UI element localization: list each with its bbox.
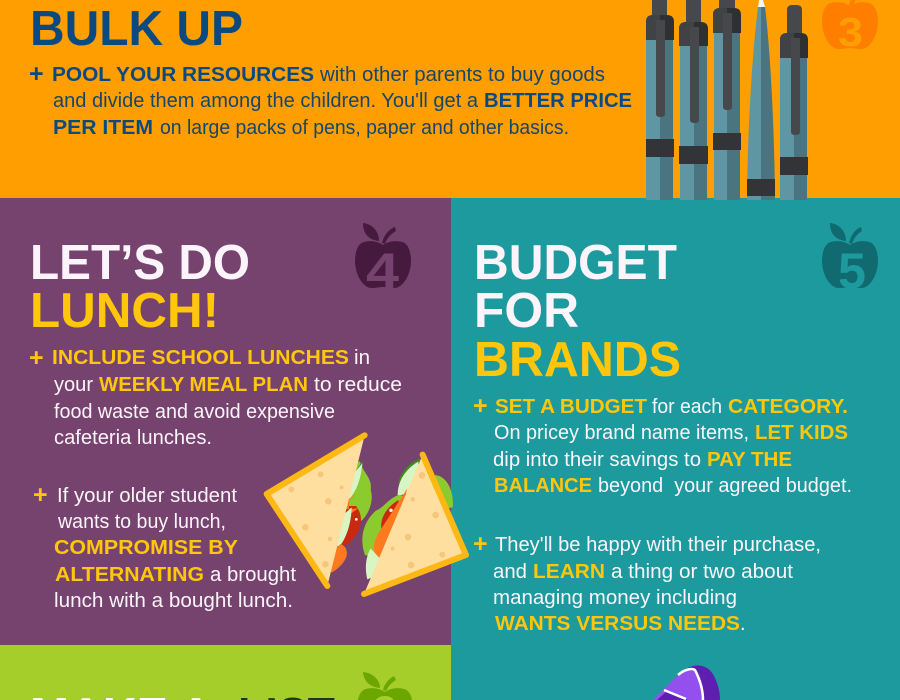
icon: apple number 6 — [357, 672, 413, 700]
text block: include school lunches: your — [54, 374, 93, 396]
text block: pool your resources: + — [29, 60, 44, 88]
text block: set a budget — [473, 392, 852, 497]
text block: happy with purchase: They'll be happy with their purchase, — [495, 534, 821, 556]
icon: apple number 3 — [822, 0, 878, 55]
text block: pool your resources: on large packs of pens, paper and other basics. — [160, 117, 569, 139]
panel: let's do lunch — [0, 198, 466, 645]
text block: older student compromise: COMPROMISE BY — [54, 537, 239, 559]
heading: budget for brands: BRANDS — [474, 333, 681, 387]
text block: include school lunches — [29, 344, 402, 449]
icon: purple shoe — [653, 665, 720, 700]
text block: include school lunches: INCLUDE SCHOOL LUNCHES — [52, 347, 349, 369]
text block: older student compromise: ALTERNATING — [55, 564, 204, 586]
icon: sandwich — [267, 435, 466, 594]
heading: budget for brands: BUDGET — [474, 236, 677, 290]
pen 1 — [646, 0, 674, 200]
text block: happy with purchase: and — [493, 561, 527, 583]
text block: happy with purchase: LEARN — [533, 561, 605, 583]
text block: happy with purchase — [473, 530, 821, 635]
heading: let's do lunch — [30, 236, 250, 338]
text block: older student compromise: If your older student — [57, 485, 237, 507]
pen 3 — [713, 0, 741, 200]
text block: include school lunches: to reduce — [314, 374, 402, 396]
text block: older student compromise: lunch with a bought lunch. — [54, 590, 293, 612]
heading: make a list — [30, 689, 335, 700]
pen 5 — [780, 5, 808, 200]
icon: apple number 5 — [822, 223, 878, 299]
right sandwich half — [362, 455, 466, 594]
text block: happy with purchase: managing money including — [493, 587, 737, 609]
text block: set a budget: CATEGORY. — [728, 396, 848, 418]
text block: pool your resources — [29, 60, 632, 139]
text block: pool your resources: POOL YOUR RESOURCES — [52, 64, 314, 86]
text block: set a budget: + — [473, 392, 488, 420]
icon: apple number 4 — [355, 223, 411, 299]
text block: set a budget: PAY THE — [707, 449, 792, 471]
text block: set a budget: beyond your agreed budget. — [598, 475, 852, 497]
icon: apple number 5: 5 — [838, 243, 866, 299]
text block: set a budget: dip into their savings to — [493, 449, 701, 471]
text block: include school lunches: WEEKLY MEAL PLAN — [99, 374, 308, 396]
panel: budget for brands — [451, 198, 900, 700]
text block: pool your resources: BETTER PRICE — [484, 90, 632, 112]
panel: make a list — [0, 645, 451, 700]
text block: pool your resources: and divide them among the children. You'll get a — [53, 90, 479, 112]
heading: budget for brands: FOR — [474, 284, 579, 338]
text block: set a budget: On pricey brand name items, — [494, 422, 749, 444]
text block: include school lunches: food waste and avoid expensive — [54, 401, 335, 423]
text block: set a budget: for each — [652, 396, 722, 418]
text block: set a budget: SET A BUDGET — [495, 396, 647, 418]
text block: pool your resources: with other parents to buy goods — [319, 64, 605, 86]
heading: bulk up: BULK UP — [30, 2, 243, 56]
text block: happy with purchase: WANTS VERSUS NEEDS — [495, 613, 740, 635]
text block: older student compromise — [33, 481, 296, 612]
text block: happy with purchase: a thing or two about — [611, 561, 793, 583]
text block: pool your resources: PER ITEM — [53, 117, 153, 139]
text block: older student compromise: + — [33, 481, 48, 509]
heading: let's do lunch: LET’S DO — [30, 236, 250, 290]
heading: budget for brands — [474, 236, 681, 387]
text block: older student compromise: wants to buy lunch, — [57, 511, 226, 533]
text block: include school lunches: in — [354, 347, 370, 369]
text block: set a budget: BALANCE — [494, 475, 592, 497]
panel: bulk up — [0, 0, 900, 200]
text block: happy with purchase: + — [473, 530, 488, 558]
text block: set a budget: LET KIDS — [755, 422, 848, 444]
text block: include school lunches: + — [29, 344, 44, 372]
text block: include school lunches: cafeteria lunches. — [54, 427, 212, 449]
icon: apple number 4: 4 — [366, 243, 399, 299]
left sandwich half — [267, 435, 372, 586]
pen 2 — [679, 0, 708, 200]
text block: older student compromise: a brought — [210, 564, 296, 586]
pen 4 — [747, 0, 775, 200]
icon: pens — [646, 0, 808, 200]
icon: apple number 3: 3 — [838, 9, 863, 55]
heading: let's do lunch: LUNCH! — [30, 284, 219, 338]
text block: happy with purchase: . — [740, 613, 746, 635]
